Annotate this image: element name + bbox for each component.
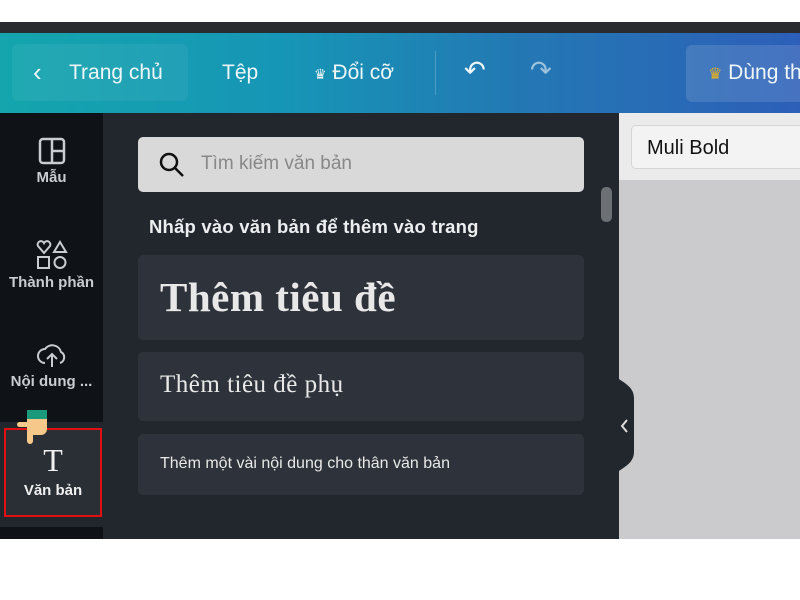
icon: T: T <box>43 442 63 478</box>
left sidebar <box>0 113 103 539</box>
scrollbar <box>601 187 612 222</box>
selected item: Văn bản <box>4 428 102 517</box>
top bar <box>0 33 800 113</box>
card: subheading <box>138 352 584 421</box>
card: heading: Thêm tiêu đề <box>160 274 396 320</box>
search box <box>138 137 584 192</box>
icon: search <box>160 152 184 177</box>
gap around selected tile <box>0 422 103 527</box>
label: Đổi cỡ: ♛ Đổi cỡ <box>314 61 394 84</box>
sidebar item: Thành phần <box>9 240 94 291</box>
canvas area <box>619 113 800 539</box>
card: body: Thêm một vài nội dung cho thân văn bản <box>160 455 450 472</box>
sidebar item: Nội dung tải lên: Nội dung ... <box>11 373 92 390</box>
divider <box>435 51 436 95</box>
card: heading <box>138 255 584 340</box>
font selector: Muli Bold <box>647 137 729 159</box>
undo icon: ↶ <box>464 55 486 85</box>
label: Trang chủ: Trang chủ <box>69 61 163 84</box>
back chevron: ‹ <box>33 57 42 87</box>
label: Văn bản <box>24 482 82 499</box>
sidebar item: Mẫu <box>36 138 66 186</box>
instruction text: Nhấp vào văn bản để thêm vào trang <box>149 216 479 237</box>
home button <box>12 44 188 101</box>
toolbar strip <box>619 113 800 180</box>
placeholder: Tìm kiếm văn bản <box>201 153 352 174</box>
panel collapse tab <box>619 379 634 471</box>
sidebar item: Thành phần: Thành phần <box>9 274 94 291</box>
sidebar item: Nội dung tải lên <box>11 344 92 390</box>
text panel <box>103 113 619 539</box>
card: body <box>138 434 584 495</box>
label: Tệp: Tệp <box>222 61 258 84</box>
sidebar item: Mẫu: Mẫu <box>36 169 66 186</box>
dark top strip <box>0 22 800 33</box>
card: subheading: Thêm tiêu đề phụ <box>160 371 344 398</box>
font selector <box>631 125 800 169</box>
redo icon: ↷ <box>530 55 552 85</box>
upgrade button <box>686 45 800 102</box>
icon: pointing hand <box>17 410 47 444</box>
